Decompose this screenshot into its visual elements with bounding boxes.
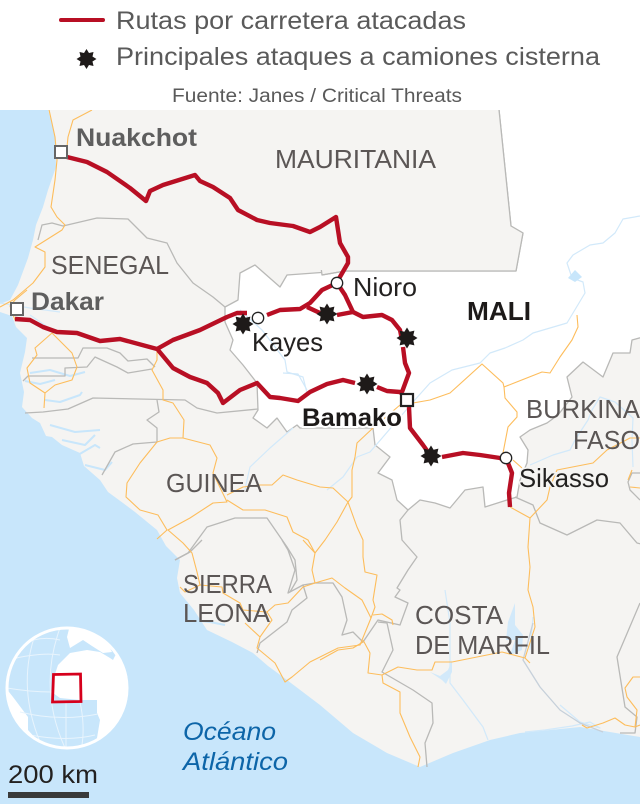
country labels: DE MARFIL [415,630,550,660]
country labels: GUINEA [166,468,263,498]
legend: star text: Principales ataques a camiones cisterna [116,43,600,71]
locator globe [5,625,135,750]
icon: attack stars [232,304,442,466]
city labels: Nuakchot [76,124,198,152]
ocean label [182,721,288,770]
city labels: Sikasso [519,463,609,493]
Mauritania territory [320,110,524,276]
country labels: BURKINA [526,394,640,424]
city labels [31,124,609,493]
rivers and lakes [0,216,640,740]
icon: legend star [77,49,96,69]
country labels: LEONA [183,598,271,628]
country labels: SENEGAL [51,250,169,280]
country labels: MALI [467,296,531,326]
legend: route text: Rutas por carretera atacadas [116,7,466,35]
country labels: MAURITANIA [275,144,437,174]
source: Fuente: Janes / Critical Threats [172,86,462,107]
city labels: Nioro [353,272,417,302]
city markers [11,146,512,464]
country labels: SIERRA [183,569,273,599]
country labels [51,144,640,660]
coastal inlets [25,370,225,625]
city labels: Bamako [302,404,402,432]
Mali territory [225,100,640,510]
locator red square [52,674,81,702]
city labels: Kayes [252,327,323,357]
scale bar [8,765,96,798]
country labels: COSTA [415,600,504,630]
legend [59,7,600,107]
country borders [23,218,640,767]
ocean label: Atlántico [181,748,288,776]
city labels: Dakar [31,288,104,316]
ocean label: Océano [183,718,276,746]
legend: route line [59,18,105,22]
attacked road routes [15,153,512,507]
scale bar: 200 km [8,761,98,789]
